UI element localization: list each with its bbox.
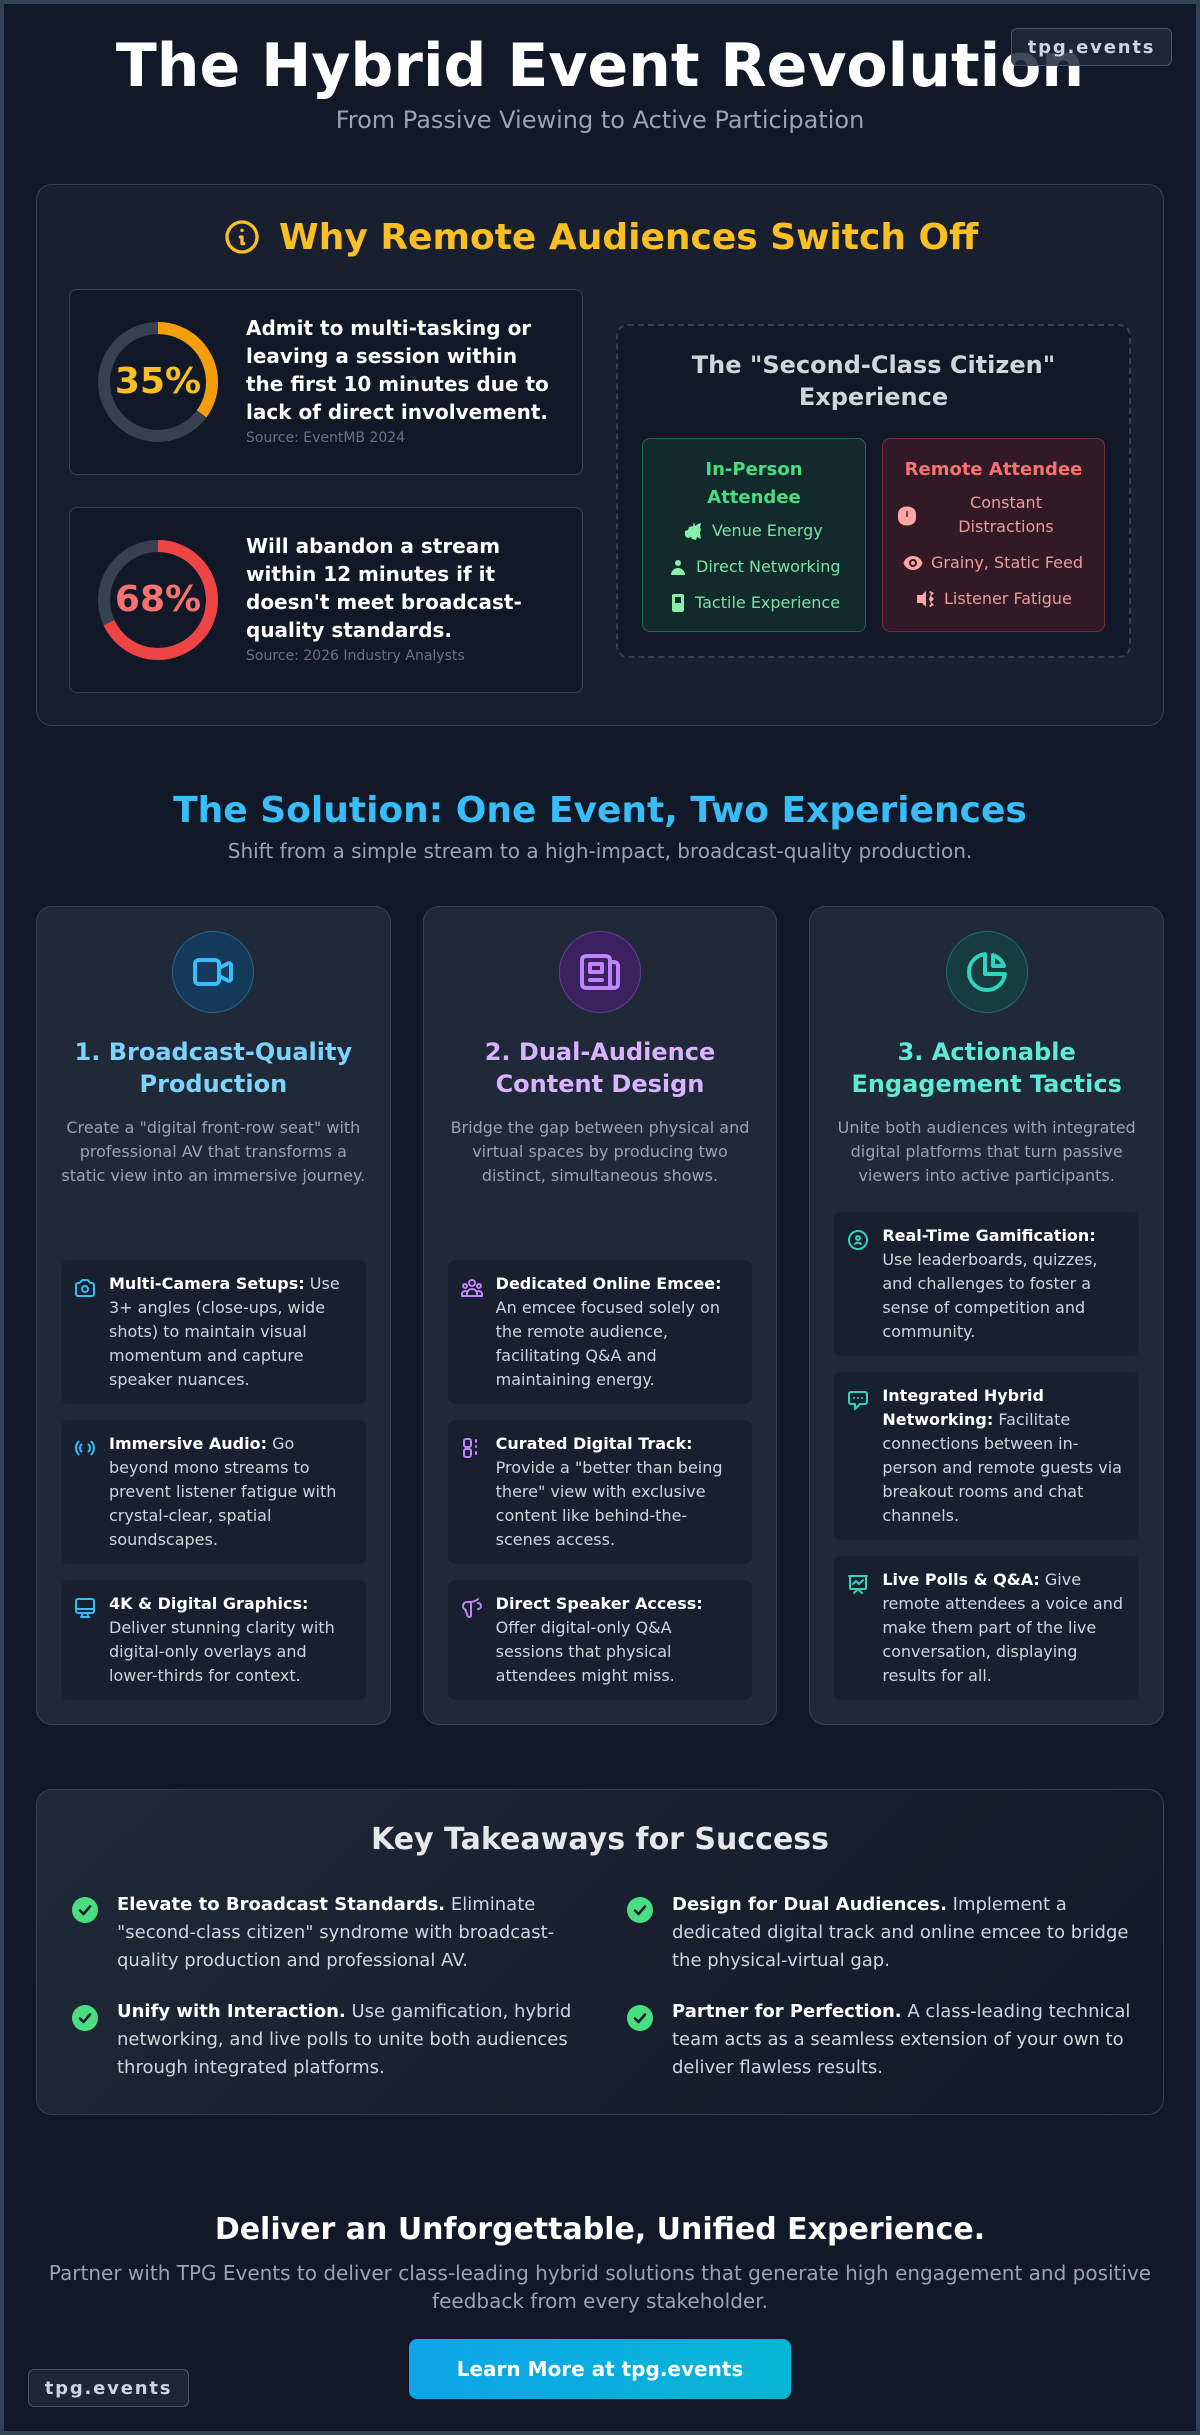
icon: audio waves — [75, 1440, 95, 1456]
panel: remote attendee — [882, 438, 1105, 632]
card description: viewers into active participants. — [858, 1166, 1115, 1185]
donut chart: 68%: 68% — [115, 579, 201, 620]
icon: tactile device — [672, 594, 684, 612]
card description — [451, 1118, 749, 1185]
card description: static view into an immersive journey. — [61, 1166, 365, 1185]
cta button — [409, 2339, 791, 2399]
heading: second-class citizen: Experience — [799, 383, 948, 411]
takeaway: dual audiences: Design for Dual Audiences. Implement a — [672, 1894, 1067, 1915]
card heading: 2. Dual-Audience — [485, 1038, 715, 1066]
item text: An emcee focused solely on — [496, 1298, 720, 1317]
stat text: Will abandon a stream — [246, 534, 500, 558]
takeaway: dual audiences — [672, 1891, 1128, 1975]
icon: monitor — [75, 1598, 95, 1618]
item: direct speaker access — [448, 1580, 752, 1700]
takeaway: dual audiences: dedicated digital track and online emcee to bridge — [672, 1922, 1128, 1943]
donut chart: 35%: 35% — [115, 361, 201, 402]
item text: shots) to maintain visual — [109, 1322, 307, 1341]
item: dedicated online emcee — [448, 1260, 752, 1404]
item text: momentum and capture — [109, 1346, 303, 1365]
cta text: feedback from every stakeholder. — [432, 2289, 768, 2313]
card description — [838, 1118, 1136, 1185]
takeaway: dual audiences: the physical-virtual gap. — [672, 1950, 890, 1971]
takeaway: perfection — [672, 1998, 1130, 2082]
panel: actionable engagement tactics — [809, 906, 1164, 1725]
item text: Deliver stunning clarity with — [109, 1618, 335, 1637]
item text: and challenges to foster a — [882, 1274, 1091, 1293]
item text: breakout rooms and chat — [882, 1482, 1083, 1501]
panel: why remote audiences switch off — [36, 184, 1164, 726]
card heading — [75, 1038, 352, 1098]
takeaway: interaction: through integrated platforms. — [117, 2057, 385, 2078]
remote heading: Remote Attendee — [905, 459, 1082, 480]
takeaway: interaction — [117, 1998, 571, 2082]
stat text: Admit to multi-tasking or — [246, 316, 531, 340]
item text: attendees might miss. — [496, 1666, 675, 1685]
icon: gamification dial — [848, 1230, 868, 1250]
stat text: leaving a session within — [246, 344, 517, 368]
icon: newspaper — [559, 931, 641, 1013]
item text: person and remote guests via — [882, 1458, 1122, 1477]
grainy feed label: Grainy, Static Feed — [931, 553, 1083, 572]
card heading: Content Design — [496, 1070, 704, 1098]
takeaway: perfection: Partner for Perfection. A class-leading technical — [672, 2001, 1130, 2022]
item text — [882, 1226, 1098, 1341]
item text: Dedicated Online Emcee: — [496, 1274, 722, 1293]
item: real-time gamification — [834, 1212, 1139, 1356]
item text: Real-Time Gamification: — [882, 1226, 1096, 1245]
constant distractions label: Constant — [970, 493, 1042, 512]
item: curated digital track — [448, 1420, 752, 1564]
item text: crystal-clear, spatial — [109, 1506, 271, 1525]
card description: distinct, simultaneous shows. — [482, 1166, 718, 1185]
item: 4k and digital graphics — [61, 1580, 366, 1700]
takeaway: interaction: networking, and live polls to unite both audiences — [117, 2029, 568, 2050]
icon: people group — [461, 1279, 483, 1297]
solution subtitle: Shift from a simple stream to a high-impact, broadcast-quality production. — [228, 839, 972, 863]
item text: there" view with exclusive — [496, 1482, 706, 1501]
item text: make them part of the live — [882, 1618, 1096, 1637]
title: The Hybrid Event Revolution — [116, 31, 1084, 101]
item text: Direct Speaker Access: — [496, 1594, 703, 1613]
item text: speaker nuances. — [109, 1370, 250, 1389]
card heading — [485, 1038, 715, 1098]
item text: Curated Digital Track: — [496, 1434, 693, 1453]
stat card: 35% — [69, 289, 583, 475]
icon: check — [627, 2005, 653, 2031]
donut chart: 35% — [98, 322, 218, 442]
item text — [496, 1274, 722, 1389]
stat card: 68% — [69, 507, 583, 693]
card description: Create a "digital front-row seat" with — [66, 1118, 360, 1137]
heading: second-class citizen: The "Second-Class Citizen" — [692, 351, 1055, 379]
card heading: Production — [139, 1070, 287, 1098]
panel: key takeaways — [36, 1789, 1164, 2115]
cta heading: Deliver an Unforgettable, Unified Experience. — [215, 2212, 985, 2247]
icon: presentation chart — [848, 1575, 868, 1594]
card heading: 3. Actionable — [898, 1038, 1076, 1066]
icon: track list — [463, 1438, 477, 1458]
item text: the remote audience, — [496, 1322, 668, 1341]
cta text: Partner with TPG Events to deliver class-leading hybrid solutions that generate high engagement and positive — [49, 2261, 1151, 2285]
panel: dual-audience content design — [423, 906, 777, 1725]
watermark: top right — [1011, 28, 1172, 66]
item text: 3+ angles (close-ups, wide — [109, 1298, 325, 1317]
takeaway: perfection: deliver flawless results. — [672, 2057, 883, 2078]
icon: chat bubble — [848, 1391, 868, 1410]
card description: virtual spaces by producing two — [472, 1142, 728, 1161]
in-person heading: Attendee — [707, 487, 801, 508]
stat source: Source: EventMB 2024 — [246, 430, 405, 446]
stat text — [246, 534, 522, 642]
card description: digital platforms that turn passive — [851, 1142, 1123, 1161]
watermark: top right: tpg.events — [1028, 37, 1155, 58]
in-person heading: In-Person — [705, 459, 803, 480]
item text: remote attendees a voice and — [882, 1594, 1123, 1613]
panel: broadcast-quality production — [36, 906, 391, 1725]
stat text: lack of direct involvement. — [246, 400, 548, 424]
item text: 4K & Digital Graphics: — [109, 1594, 308, 1613]
item: immersive audio — [61, 1420, 366, 1564]
item text: soundscapes. — [109, 1530, 218, 1549]
card description — [61, 1118, 365, 1185]
heading: why remote audiences switch off: Why Remote Audiences Switch Off — [279, 217, 978, 258]
heading: key takeaways: Key Takeaways for Success — [371, 1822, 829, 1857]
item text — [496, 1434, 723, 1549]
item text: sessions that physical — [496, 1642, 671, 1661]
item text: beyond mono streams to — [109, 1458, 310, 1477]
item text: Networking: Facilitate — [882, 1410, 1070, 1429]
card description: Unite both audiences with integrated — [838, 1118, 1136, 1137]
item text — [882, 1386, 1122, 1525]
item text: scenes access. — [496, 1530, 615, 1549]
in-person heading — [705, 459, 803, 508]
card heading: Engagement Tactics — [851, 1070, 1122, 1098]
item text: conversation, displaying — [882, 1642, 1077, 1661]
icon: mouse distraction — [898, 506, 916, 526]
item text: channels. — [882, 1506, 959, 1525]
card description: Bridge the gap between physical and — [451, 1118, 749, 1137]
item text: results for all. — [882, 1666, 992, 1685]
icon: check — [72, 2005, 98, 2031]
icon: megaphone — [462, 1598, 482, 1618]
stat text: within 12 minutes if it — [246, 562, 495, 586]
icon: venue energy — [685, 522, 701, 540]
heading: the solution: The Solution: One Event, Two Experiences — [173, 790, 1027, 831]
item text: maintaining energy. — [496, 1370, 655, 1389]
takeaway: interaction: Unify with Interaction. Use gamification, hybrid — [117, 2001, 571, 2022]
tactile experience label: Tactile Experience — [695, 593, 840, 612]
item text: lower-thirds for context. — [109, 1666, 301, 1685]
item text: Integrated Hybrid — [882, 1386, 1044, 1405]
stat text: doesn't meet broadcast- — [246, 590, 522, 614]
donut chart: 68% — [98, 540, 218, 660]
icon: info circle — [225, 220, 259, 254]
icon: camera — [75, 1279, 95, 1297]
cta text — [0, 2259, 1200, 2315]
card heading: 1. Broadcast-Quality — [75, 1038, 352, 1066]
watermark: bottom left — [28, 2369, 189, 2407]
icon: video camera — [172, 931, 254, 1013]
item: live polls and q&a — [834, 1556, 1139, 1700]
stat text: quality standards. — [246, 618, 452, 642]
item text: facilitating Q&A and — [496, 1346, 657, 1365]
item text — [109, 1274, 340, 1389]
listener fatigue label: Listener Fatigue — [944, 589, 1072, 608]
panel: in-person attendee — [642, 438, 866, 632]
item text: Use leaderboards, quizzes, — [882, 1250, 1098, 1269]
item text — [109, 1594, 335, 1685]
item: integrated hybrid networking — [834, 1372, 1139, 1540]
watermark: bottom left: tpg.events — [45, 2378, 172, 2399]
icon: muted speaker — [917, 591, 934, 607]
item text: digital-only overlays and — [109, 1642, 307, 1661]
takeaway: perfection: team acts as a seamless extension of your own to — [672, 2029, 1124, 2050]
item text: prevent listener fatigue with — [109, 1482, 336, 1501]
heading: second-class citizen — [692, 351, 1055, 411]
subtitle: From Passive Viewing to Active Participation — [336, 106, 864, 134]
item text: sense of competition and — [882, 1298, 1085, 1317]
icon: person — [671, 560, 685, 575]
icon: check — [627, 1897, 653, 1923]
item text: Multi-Camera Setups: Use — [109, 1274, 340, 1293]
item text: Offer digital-only Q&A — [496, 1618, 672, 1637]
item text: Provide a "better than being — [496, 1458, 723, 1477]
cta button: Learn More at tpg.events — [457, 2357, 743, 2381]
card heading — [851, 1038, 1122, 1098]
item text: content like behind-the- — [496, 1506, 687, 1525]
constant distractions label: Distractions — [958, 517, 1054, 536]
stat source: Source: 2026 Industry Analysts — [246, 648, 465, 664]
stat text: the first 10 minutes due to — [246, 372, 549, 396]
takeaway: broadcast standards — [117, 1894, 554, 1971]
item text — [882, 1570, 1123, 1685]
takeaway: broadcast standards: "second-class citizen" syndrome with broadcast- — [117, 1922, 554, 1943]
item text: Immersive Audio: Go — [109, 1434, 294, 1453]
item text — [496, 1594, 703, 1685]
icon: check — [72, 1897, 98, 1923]
icon: eye — [904, 556, 922, 570]
card description: professional AV that transforms a — [80, 1142, 347, 1161]
item text: Live Polls & Q&A: Give — [882, 1570, 1081, 1589]
stat text — [246, 316, 549, 424]
direct networking label: Direct Networking — [696, 557, 841, 576]
constant distractions label — [958, 493, 1054, 536]
item text: community. — [882, 1322, 975, 1341]
venue energy label: Venue Energy — [712, 521, 823, 540]
item text — [109, 1434, 336, 1549]
panel: second-class citizen experience — [616, 324, 1131, 658]
takeaway: broadcast standards: Elevate to Broadcast Standards. Eliminate — [117, 1894, 535, 1915]
item: multi-camera setups — [61, 1260, 366, 1404]
takeaway: broadcast standards: quality production and professional AV. — [117, 1950, 468, 1971]
item text: connections between in- — [882, 1434, 1079, 1453]
icon: pie chart — [946, 931, 1028, 1013]
